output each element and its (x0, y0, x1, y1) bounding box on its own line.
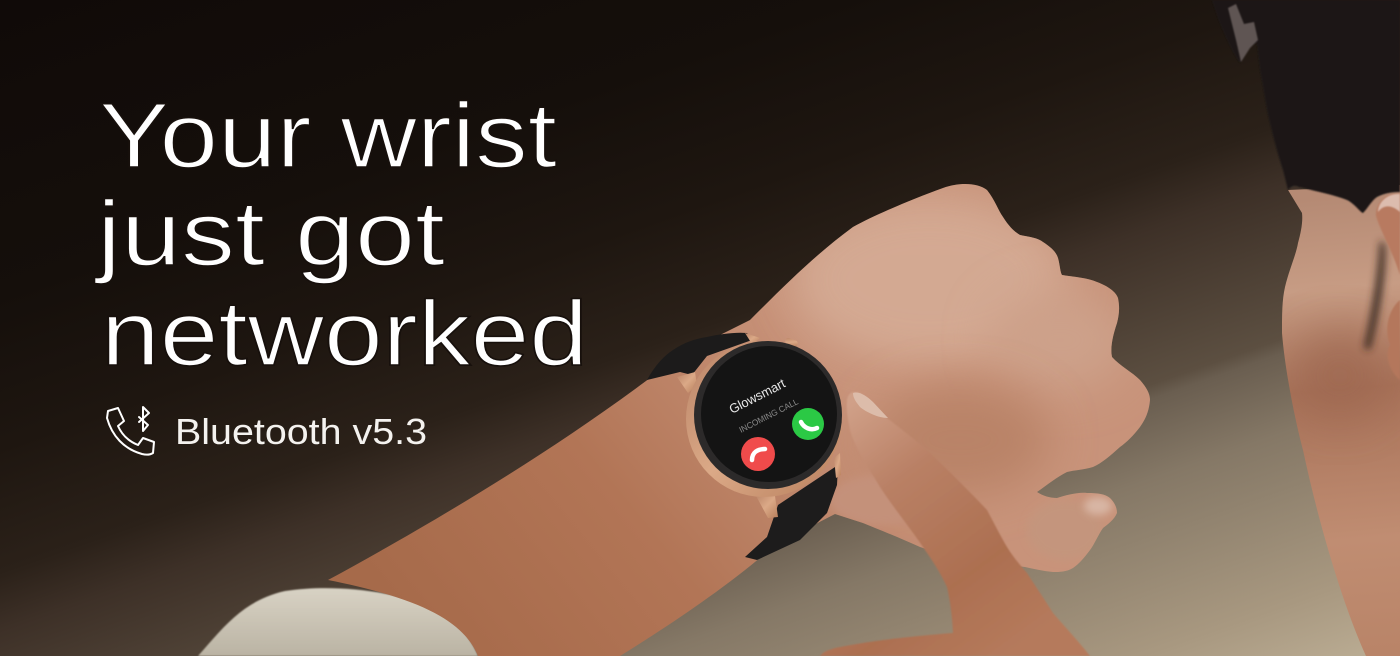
title: just got (93, 183, 445, 285)
smartwatch (677, 333, 842, 518)
icon: fingernail (853, 392, 888, 418)
title: networked (101, 283, 588, 385)
watch incoming call label: INCOMING CALL (737, 396, 800, 435)
photo: sleeve (198, 588, 478, 656)
watch screen (701, 346, 837, 482)
photo: forearm and hand (300, 170, 1180, 656)
watch caller name: Glowsmart (727, 375, 788, 417)
icon: phone with bluetooth (107, 407, 154, 455)
photo: pointing finger (820, 392, 1090, 656)
icon: answer call button (792, 408, 824, 440)
title: Your wrist (99, 85, 557, 187)
title (93, 85, 588, 385)
photo: ear (1376, 194, 1400, 275)
icon: decline call button (741, 437, 775, 471)
photo: watch strap (647, 333, 838, 560)
photo: hair highlight (1228, 4, 1258, 62)
watch lugs (677, 333, 841, 518)
photo: hair (1212, 0, 1400, 213)
watch case (686, 341, 842, 497)
photo: person's face (1282, 185, 1400, 656)
photo: sideburn shadow (1364, 240, 1385, 350)
bluetooth label: Bluetooth v5.3 (175, 411, 427, 452)
